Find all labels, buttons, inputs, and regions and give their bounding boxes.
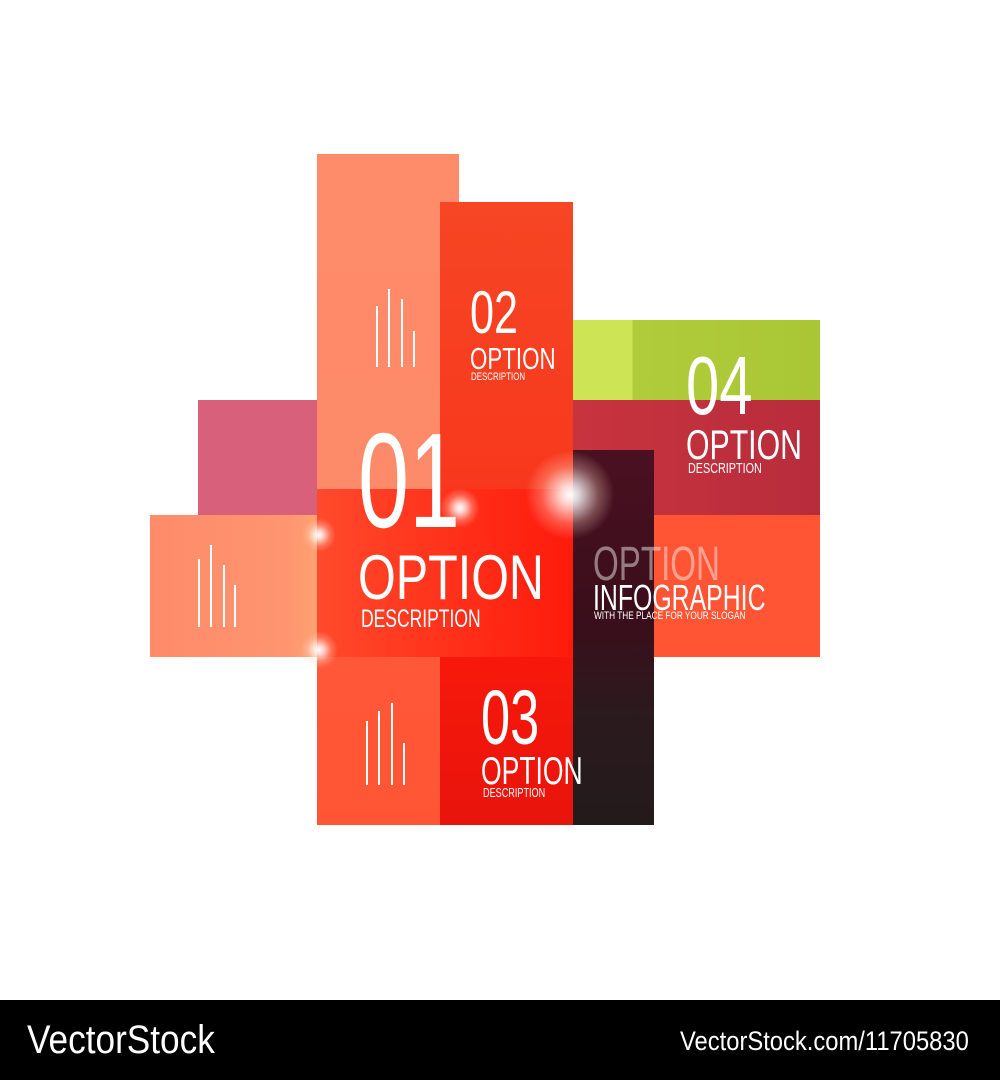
text: option infographic slogan: INFOGRAPHIC — [593, 577, 766, 618]
text: option 03 — [481, 675, 583, 800]
footer: logo: VectorStock — [27, 1018, 215, 1062]
text: option infographic slogan: WITH THE PLACE FOR YOUR SLOGAN — [594, 610, 745, 622]
text: option 04: OPTION — [686, 421, 802, 468]
panel: green bar — [573, 320, 820, 400]
icon: bars bottom — [366, 703, 405, 785]
text: option 03: 03 — [481, 675, 539, 761]
text: option 01: OPTION — [358, 543, 544, 613]
panel: right orange box — [654, 515, 820, 657]
text: option 04: DESCRIPTION — [688, 460, 762, 477]
panel: orange column — [317, 154, 459, 825]
text: option 02: DESCRIPTION — [471, 371, 525, 383]
panel: center red block — [317, 489, 573, 657]
panel: pink horizontal bar — [198, 400, 820, 515]
text: option infographic slogan — [593, 538, 766, 622]
text: option 02 — [470, 279, 556, 383]
text: option 02: OPTION — [470, 341, 556, 376]
text: option 04: 04 — [686, 339, 752, 432]
text: option infographic slogan: OPTION — [593, 538, 720, 591]
text: option 03: OPTION — [481, 750, 583, 793]
text: option 04 — [686, 339, 802, 477]
footer: url: VectorStock.com/11705830 — [680, 1026, 969, 1056]
text: option 01 — [358, 405, 544, 633]
text: option 01: DESCRIPTION — [361, 605, 481, 633]
icon: bars left — [198, 545, 236, 627]
footer bar — [0, 1000, 1000, 1080]
text: option 02: 02 — [470, 279, 518, 346]
panel: dark column — [573, 450, 654, 825]
icon: bars top — [376, 289, 415, 367]
icon: light flares — [302, 452, 612, 668]
panel: red column — [440, 202, 573, 825]
text: option 03: DESCRIPTION — [483, 785, 545, 800]
panel: left orange box — [150, 515, 317, 657]
text: option 01: 01 — [358, 405, 460, 556]
